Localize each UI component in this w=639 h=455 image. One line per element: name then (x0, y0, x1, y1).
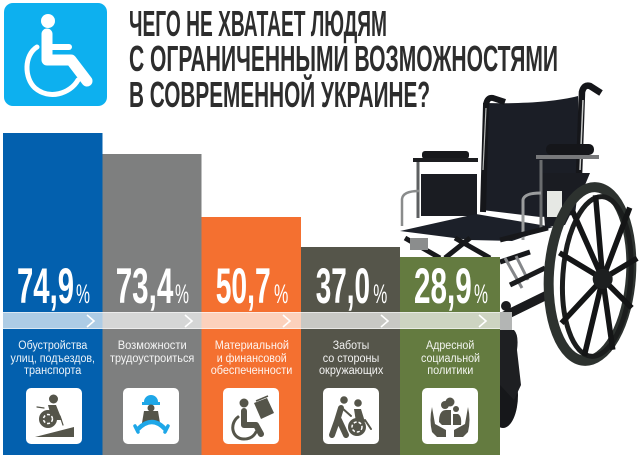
label: со стороны (323, 353, 379, 365)
icon: carer with wheelchair user (323, 388, 379, 444)
label (319, 340, 384, 377)
panel: employment (102, 154, 202, 455)
value 73,4%: % (175, 279, 189, 309)
caster wheel (488, 330, 521, 428)
translucent progress band with chevrons (3, 312, 500, 329)
label: транспорта (24, 365, 82, 377)
title: В СОВРЕМЕННОЙ УКРАИНЕ? (129, 73, 430, 115)
label: трудоустроиться (110, 353, 194, 365)
label (211, 340, 292, 377)
label: окружающих (319, 365, 384, 377)
panel: financial security (202, 217, 301, 455)
label: Возможности (118, 340, 187, 352)
label: Адресной (426, 340, 474, 352)
value 28,9%: 28,9 (414, 258, 472, 314)
value 50,7%: % (274, 279, 288, 309)
frame (405, 228, 548, 330)
value 74,9%: % (76, 279, 90, 309)
icon: wheelchair on ramp (26, 388, 82, 444)
label (110, 340, 194, 365)
label (10, 340, 95, 377)
value 37,0%: 37,0 (316, 258, 370, 314)
value 50,7%: 50,7 (216, 258, 271, 314)
label: Материальной (215, 340, 289, 352)
backrest (482, 96, 580, 217)
label: Обустройства (18, 340, 88, 352)
icon: hands holding family (422, 388, 478, 444)
push handles (483, 86, 601, 212)
wheelchair photo illustration (400, 86, 639, 428)
icon: header wheelchair symbol (4, 3, 107, 106)
label: социальной (421, 353, 480, 365)
value 28,9%: % (474, 279, 488, 309)
large wheel (543, 184, 639, 364)
label: и финансовой (217, 353, 287, 365)
far armrest and side panel (402, 151, 478, 226)
title (129, 3, 558, 115)
value 73,4%: 73,4 (116, 258, 173, 314)
icon: wheelchair user with wallet (223, 388, 279, 444)
value 74,9%: 74,9 (17, 258, 74, 314)
panel: care from others (301, 247, 400, 455)
label: улиц, подъездов, (10, 353, 95, 365)
label (421, 340, 480, 377)
label: Заботы (333, 340, 369, 352)
seat (400, 214, 553, 241)
icon: worker with wrench (123, 388, 179, 444)
value 37,0%: % (373, 279, 387, 309)
title: ЧЕГО НЕ ХВАТАЕТ ЛЮДЯМ (129, 3, 387, 44)
label: обеспеченности (211, 365, 292, 377)
panel: targeted social policy (400, 257, 500, 455)
near armrest and side panel (523, 144, 599, 240)
label: политики (427, 365, 473, 377)
panel: streets and transport (3, 133, 102, 455)
